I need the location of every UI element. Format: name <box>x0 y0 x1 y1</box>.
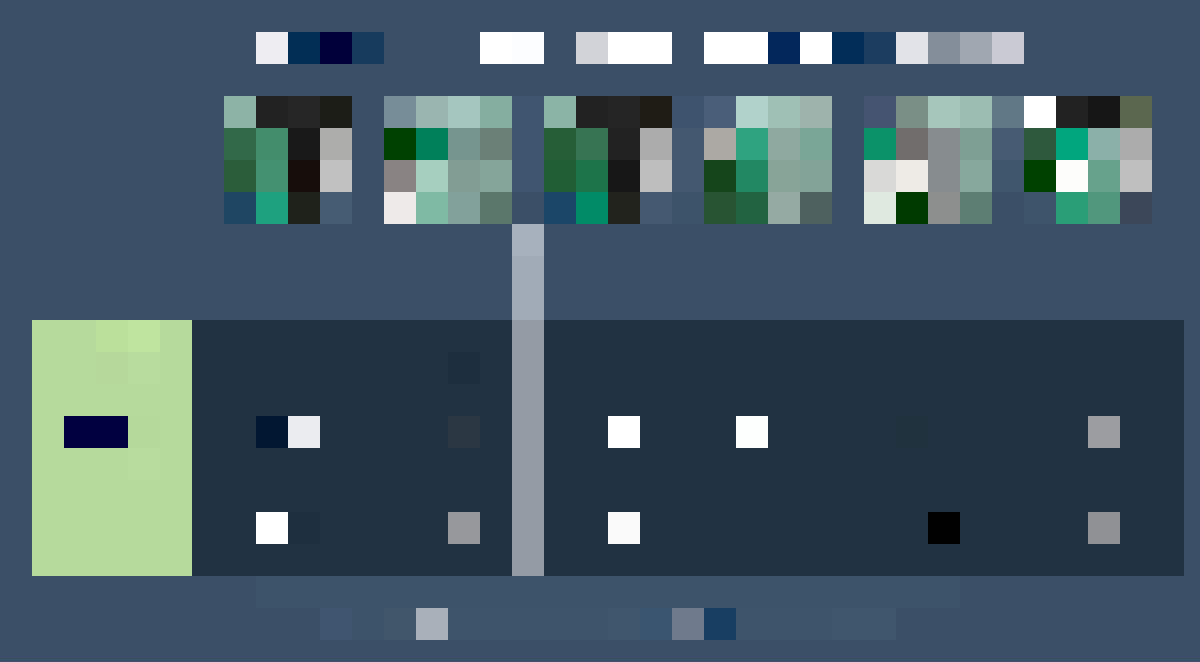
title <box>224 32 1024 64</box>
card 1 <box>224 96 352 224</box>
card 3 <box>544 96 704 224</box>
sidebar label <box>64 416 128 448</box>
table divider <box>512 320 544 576</box>
footer note <box>256 576 960 640</box>
card 4 <box>704 96 832 224</box>
card 2 <box>384 96 512 224</box>
row 1 values <box>256 352 1120 448</box>
card 5 <box>864 96 1024 224</box>
panel: dark data table <box>192 320 1184 576</box>
card 6 <box>1024 96 1152 224</box>
vertical divider <box>512 96 544 320</box>
row 2 values <box>256 512 1120 544</box>
panel: green sidebar <box>32 320 192 576</box>
